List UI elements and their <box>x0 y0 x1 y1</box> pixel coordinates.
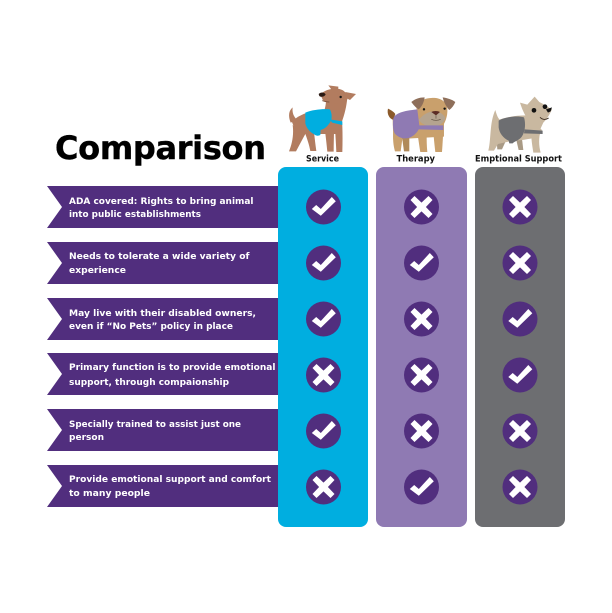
row 1: ADA covered: into public establishments <box>69 210 201 220</box>
row 5: trained for one person <box>47 409 278 451</box>
row 6: comfort many people <box>47 465 278 507</box>
row 3: live with owners <box>47 298 278 340</box>
panel: service column <box>278 167 368 527</box>
row 3: live with owners: even if “No Pets” policy in place <box>69 322 233 332</box>
service marks <box>306 190 341 504</box>
row 4: emotional support function <box>47 353 278 395</box>
row 2: tolerate variety: experience <box>69 266 126 276</box>
row 4: emotional support function: Primary function is to provide emotional <box>69 363 276 373</box>
emotional support marks <box>502 190 538 504</box>
row 5: trained for one person: Specially trained to assist just one <box>69 420 241 430</box>
label: therapy: Therapy <box>396 154 436 164</box>
title: Comparison <box>55 129 266 167</box>
icon: therapy dog <box>388 97 455 152</box>
icon: service dog <box>289 85 356 152</box>
panel: emotional support column <box>475 167 565 527</box>
label: emotional support: Emptional Support <box>475 154 562 164</box>
row 1: ADA covered: ADA covered: Rights to bring animal <box>69 197 254 207</box>
panel: therapy column <box>376 167 467 527</box>
row 6: comfort many people: to many people <box>69 489 150 499</box>
row 6: comfort many people: Provide emotional support and comfort <box>69 475 271 485</box>
row 2: tolerate variety: Needs to tolerate a wide variety of <box>69 252 250 262</box>
therapy marks <box>404 190 439 504</box>
icon: emotional support dog <box>488 97 552 153</box>
row 4: emotional support function: support, through compaionship <box>69 378 229 388</box>
row 1: ADA covered <box>47 186 278 228</box>
row 3: live with owners: May live with their disabled owners, <box>69 309 256 319</box>
label: service: Service <box>306 154 339 164</box>
row 5: trained for one person: person <box>69 433 104 443</box>
row 2: tolerate variety <box>47 242 278 284</box>
